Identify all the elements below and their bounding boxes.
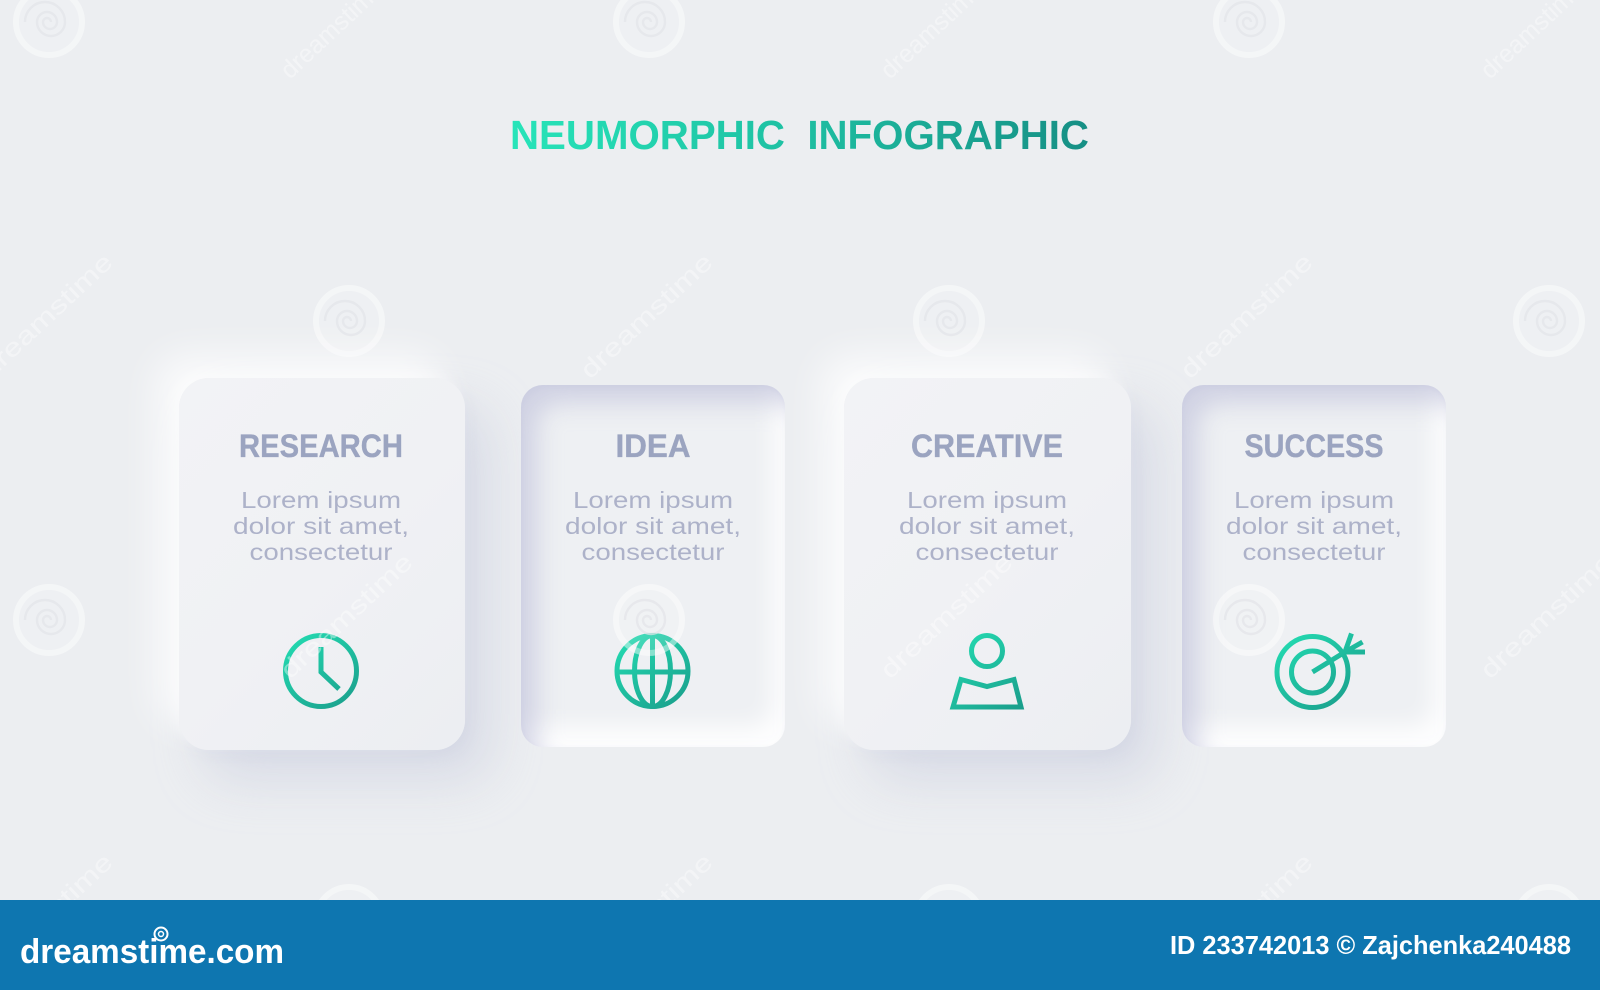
footer bar	[0, 900, 1600, 990]
text block: research: consectetur	[250, 539, 393, 565]
footer image id and credit: ID 233742013 © Zajchenka240488	[1170, 930, 1571, 960]
text block: success: Lorem ipsum	[1234, 487, 1394, 513]
text block: creative: Lorem ipsum	[907, 487, 1067, 513]
text block: research: Lorem ipsum	[241, 487, 401, 513]
text block: creative	[899, 487, 1075, 565]
watermark overlay: dreamstime	[275, 548, 418, 684]
footer logo: dreamstime.com	[20, 933, 284, 971]
icon: globe	[617, 635, 688, 707]
title: NEUMORPHIC INFOGRAPHIC	[510, 112, 1089, 158]
icon: person on map	[953, 636, 1021, 707]
watermark overlay: dreamstime	[575, 848, 718, 984]
text block: success	[1226, 487, 1402, 565]
text block: success: dolor sit amet,	[1226, 513, 1402, 539]
panel: creative	[844, 378, 1131, 750]
text block: idea: dolor sit amet,	[565, 513, 741, 539]
text block: creative: dolor sit amet,	[899, 513, 1075, 539]
watermark overlay: dreamstime	[1175, 848, 1318, 984]
heading: research: RESEARCH	[239, 428, 403, 464]
text block: creative: consectetur	[916, 539, 1059, 565]
heading: creative: CREATIVE	[911, 428, 1063, 464]
watermark overlay: dreamstime	[875, 548, 1018, 684]
text block: idea: Lorem ipsum	[573, 487, 733, 513]
text block: research: dolor sit amet,	[233, 513, 409, 539]
watermark overlay: dreamstime	[1475, 548, 1600, 684]
text block: research	[233, 487, 409, 565]
icon: target with arrow	[1277, 634, 1365, 708]
watermark overlay: dreamstime	[1175, 248, 1318, 384]
panel: success	[1182, 385, 1446, 747]
icon: clock	[286, 636, 356, 706]
watermark overlay: dreamstime	[575, 248, 718, 384]
panel: research	[179, 378, 465, 750]
panel: idea	[521, 385, 785, 747]
text block: idea	[565, 487, 741, 565]
heading: success: SUCCESS	[1244, 428, 1384, 464]
text block: success: consectetur	[1242, 539, 1386, 565]
heading: idea: IDEA	[616, 428, 690, 464]
text block: idea: consectetur	[582, 539, 725, 565]
